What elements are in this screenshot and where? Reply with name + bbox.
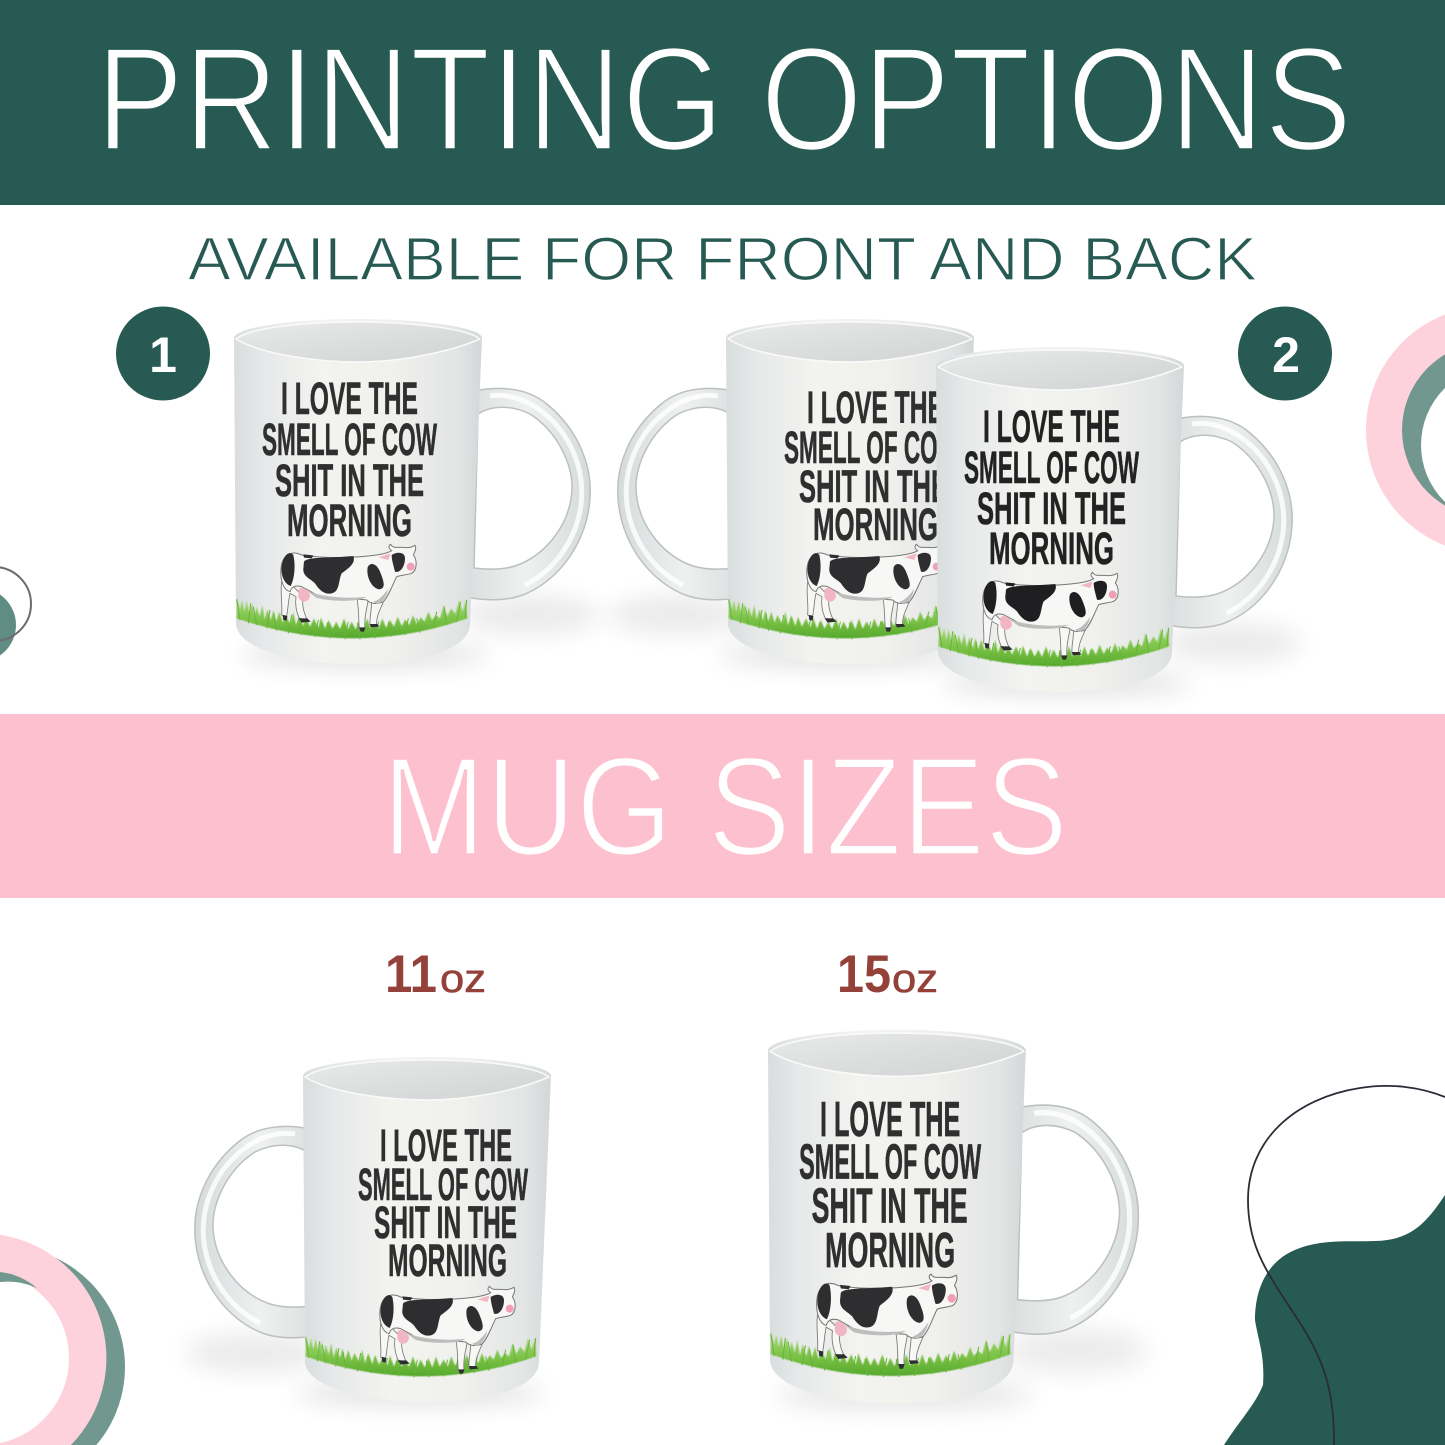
- label: 11oz: [385, 945, 486, 1004]
- heading: mug sizes: MUG SIZES: [382, 727, 1068, 885]
- mug 15oz cow and grass: [771, 1274, 1011, 1377]
- mug 2 front interior: [938, 350, 1182, 390]
- mug 11oz slogan: I LOVE THE: [380, 1120, 512, 1171]
- mug 15oz slogan: I LOVE THE: [820, 1093, 960, 1147]
- label: 15oz: [837, 945, 938, 1004]
- mug 11oz slogan: [358, 1120, 528, 1286]
- mug 11oz cow and grass: [306, 1286, 536, 1377]
- mug 1: handle right: [234, 319, 600, 667]
- mug 1 slogan: SMELL OF COW: [262, 414, 437, 465]
- decoration: bottom-left rings: [0, 1234, 125, 1445]
- mug 11oz body: [303, 1057, 551, 1402]
- mug 2 back slogan: SMELL OF COW: [784, 422, 959, 473]
- mug 11oz: handle left: SMELL OF COW: [358, 1159, 528, 1210]
- mug 2 back handle and shadow: [608, 388, 968, 667]
- mug 15oz slogan: [799, 1093, 982, 1278]
- mug 2 back cow and grass: [729, 544, 959, 639]
- mug 1 body: [234, 319, 482, 664]
- mug 15oz interior: [770, 1033, 1024, 1076]
- label: 11oz: 11: [385, 945, 437, 1004]
- header band: [0, 0, 1445, 205]
- mug 2 back interior: [728, 322, 972, 362]
- mug 2 back slogan: I LOVE THE: [807, 382, 944, 433]
- mug 1 slogan: MORNING: [287, 495, 412, 546]
- mug 15oz slogan: MORNING: [825, 1224, 955, 1278]
- mug 1 slogan: I LOVE THE: [281, 373, 418, 424]
- mug 1 slogan: SHIT IN THE: [275, 455, 424, 506]
- number badge 1: [116, 306, 210, 400]
- mug 2 front slogan: MORNING: [989, 523, 1114, 574]
- mug 15oz slogan: SHIT IN THE: [812, 1180, 968, 1234]
- mug 1 slogan: [262, 373, 437, 546]
- number badge 2: 2: [1272, 327, 1300, 383]
- decoration: right rings: [1366, 306, 1445, 554]
- mug 11oz slogan: SHIT IN THE: [374, 1197, 517, 1248]
- decoration: bottom-right outline curve: [1248, 1086, 1445, 1445]
- number badge 1: 1: [149, 327, 177, 383]
- mug 2 front slogan: SMELL OF COW: [964, 442, 1139, 493]
- mug 2 front slogan: [964, 401, 1139, 574]
- pink band: [0, 714, 1445, 898]
- mug 11oz handle and shadow: [185, 1126, 545, 1405]
- mug 2 front body: [936, 347, 1184, 692]
- mug 2 back: handle left: [608, 319, 974, 667]
- mug 2 back slogan: [784, 382, 959, 550]
- mug 2 back slogan: MORNING: [813, 499, 938, 550]
- mug 1 interior: [236, 322, 480, 362]
- mug 2 front handle and shadow: [942, 416, 1302, 695]
- label: 15oz: 15: [837, 945, 891, 1004]
- mug 11oz interior: [305, 1060, 549, 1100]
- mug 15oz body: [768, 1030, 1026, 1404]
- mug 2 back body: [726, 319, 974, 664]
- subtitle: AVAILABLE FOR FRONT AND BACK: [188, 225, 1257, 293]
- mug 15oz handle and shadow: [774, 1105, 1149, 1407]
- mug 11oz: handle left: [185, 1057, 551, 1405]
- mug 2 front slogan: SHIT IN THE: [977, 483, 1126, 534]
- decoration: bottom-right blob: [1224, 1195, 1445, 1445]
- number badge 2: [1238, 306, 1332, 400]
- label: 15oz: oz: [892, 957, 938, 1001]
- mug 15oz: handle right: [768, 1030, 1149, 1407]
- mug 2 front slogan: I LOVE THE: [983, 401, 1120, 452]
- mug 2 front cow and grass: [939, 572, 1169, 667]
- mug 11oz slogan: MORNING: [388, 1235, 507, 1286]
- mug 2 back slogan: SHIT IN THE: [799, 461, 948, 512]
- mug 2 front: handle right: [936, 347, 1302, 695]
- mug 1 cow and grass: [237, 544, 467, 639]
- mug 15oz slogan: SMELL OF COW: [799, 1135, 982, 1190]
- mug 1 handle and shadow: [240, 388, 600, 667]
- decoration: left circles: [0, 567, 31, 662]
- label: 11oz: oz: [440, 957, 486, 1001]
